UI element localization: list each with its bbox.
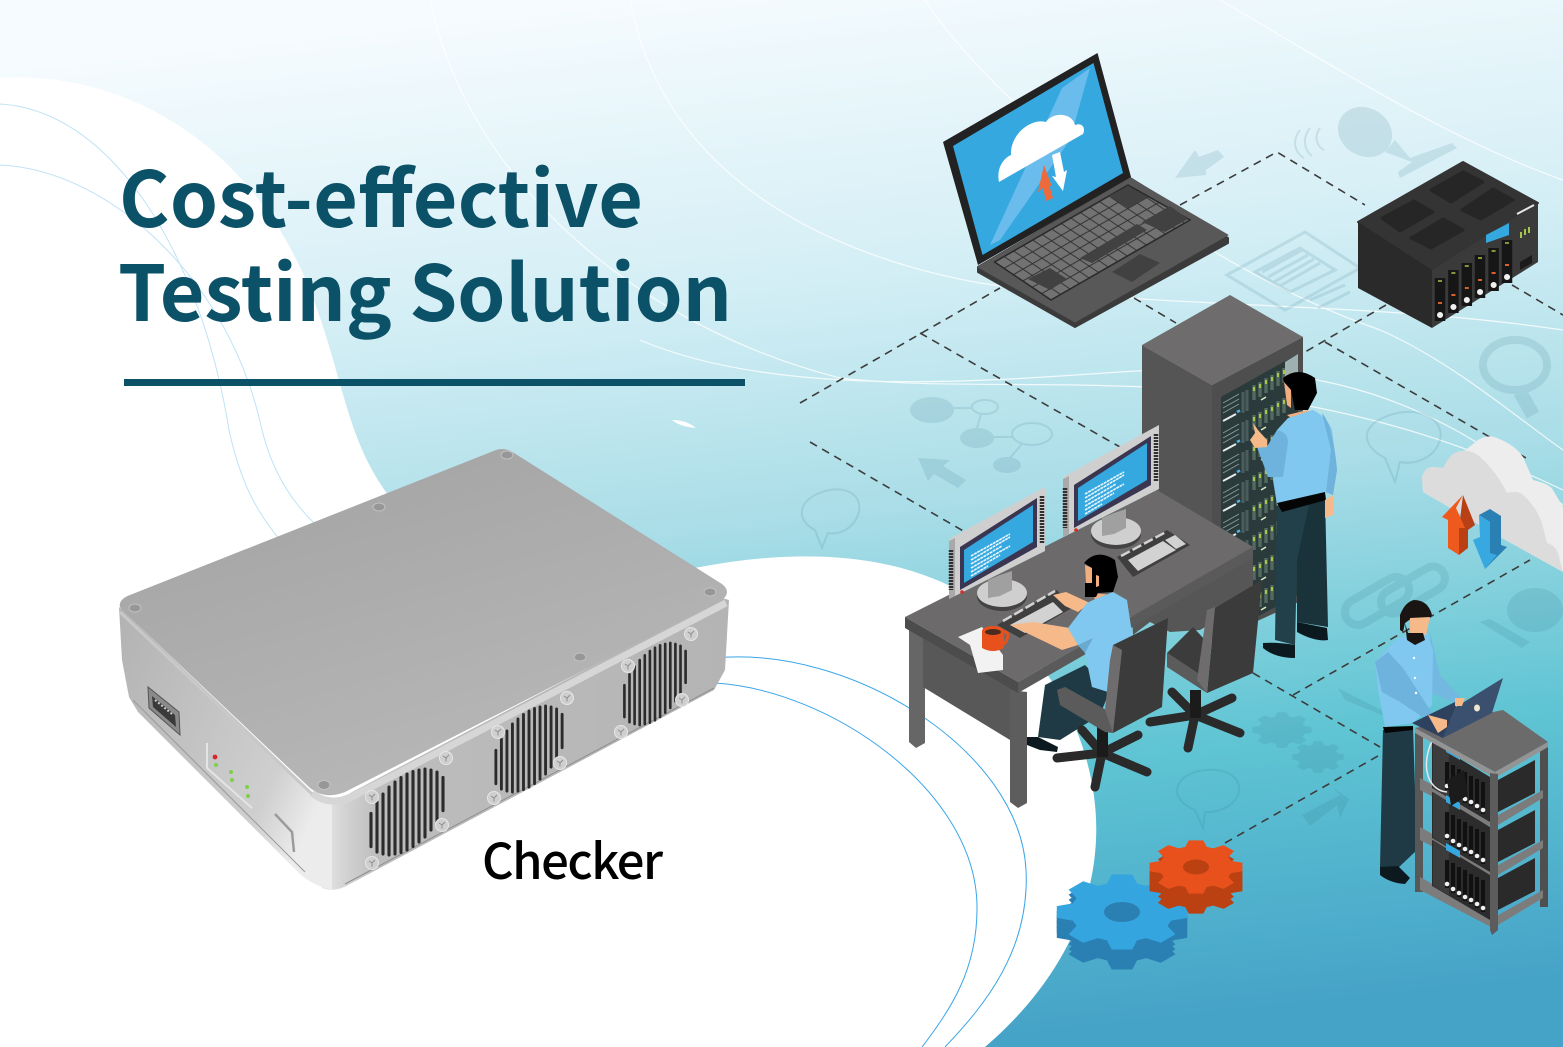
engineer shirt — [1375, 633, 1433, 727]
dashed network lines — [800, 152, 1563, 843]
orange gear — [1150, 840, 1242, 914]
shelf left leg — [1415, 730, 1423, 892]
chair 2 back — [1207, 580, 1262, 693]
NAS top pads — [1382, 172, 1513, 248]
desk leg left — [909, 628, 925, 748]
engineer shirt — [1273, 410, 1337, 505]
title: Cost-effective — [119, 139, 643, 250]
laptop screen frame — [943, 53, 1131, 265]
engineer head — [1283, 372, 1317, 410]
engineer arm — [1257, 430, 1288, 477]
device side screws — [366, 628, 698, 870]
desk top — [905, 490, 1253, 682]
shelf front leg — [1490, 773, 1498, 935]
desk leg front — [1010, 690, 1027, 808]
chair 1 back — [1113, 618, 1168, 733]
icon: cloud on screen — [998, 115, 1084, 182]
icon: gears faint — [1252, 712, 1344, 773]
title rule — [124, 379, 745, 386]
engineer at laptop, lower body — [1380, 727, 1417, 884]
computer monitors — [949, 425, 1159, 611]
laptop trackpad — [1112, 254, 1160, 282]
desk right panel — [1132, 545, 1253, 635]
engineer front leg and shoe — [1275, 500, 1310, 645]
seated engineer lower arm — [1010, 622, 1078, 650]
icon: network nodes — [910, 397, 1052, 488]
standing engineer — [1250, 372, 1337, 658]
device status LEDs — [207, 743, 252, 808]
NAS top — [1358, 162, 1538, 270]
title — [118, 139, 732, 344]
engineer at laptop, upper body — [1375, 600, 1503, 738]
blue down arrow — [1473, 509, 1507, 569]
NAS drive bays — [1438, 240, 1509, 321]
server rack — [1142, 295, 1303, 640]
engineer shoe — [1380, 866, 1410, 884]
device top face — [120, 449, 727, 795]
engineer near arm — [1375, 652, 1432, 720]
cloud upload icon — [1422, 436, 1563, 572]
laptop base — [978, 178, 1228, 327]
keyboards — [997, 530, 1190, 638]
icon: download arrow — [1052, 152, 1067, 191]
rack top — [1142, 295, 1303, 385]
laptop screen — [953, 63, 1123, 255]
office chair 2 — [1150, 580, 1262, 748]
laptop keyboard — [995, 185, 1190, 300]
faint background icons — [802, 97, 1563, 828]
engineer belt — [1383, 726, 1413, 733]
engineer hair — [1400, 600, 1432, 632]
seated engineer legs and shoes — [1038, 665, 1110, 740]
paper on desk — [958, 627, 1003, 673]
seated engineer head — [1084, 555, 1118, 597]
cloud front surface — [1422, 451, 1563, 572]
small white sliver — [672, 420, 696, 428]
NAS display — [1486, 223, 1509, 243]
equipment shelf rack — [1415, 710, 1548, 935]
device right face — [320, 598, 729, 890]
chair 2 star base — [1150, 692, 1240, 748]
stored NAS units — [1426, 736, 1535, 920]
product: Checker device — [119, 449, 729, 890]
icon: magnifier — [1483, 340, 1547, 415]
thin blue arc lines, right — [715, 657, 1026, 1047]
device top screws — [129, 451, 716, 790]
device name: Checker — [482, 823, 664, 894]
engineer rear leg and shoe — [1297, 495, 1328, 627]
engineer far arm — [1430, 633, 1460, 703]
rack left side — [1142, 345, 1212, 560]
laptop on shelf — [1412, 678, 1503, 738]
engineer hands — [1428, 698, 1465, 733]
device button — [275, 814, 294, 852]
seated engineer — [1010, 555, 1132, 752]
engineer neck — [1287, 410, 1313, 421]
icon: document monitor — [1227, 232, 1360, 310]
icon: chain link — [1340, 562, 1449, 630]
icon: upload arrow — [1038, 165, 1053, 201]
NAS storage unit — [1358, 162, 1538, 328]
red up arrow — [1442, 495, 1475, 555]
device USB port — [148, 687, 180, 735]
engineer pants — [1380, 727, 1417, 868]
icon: speech bubbles — [802, 412, 1441, 828]
thin blue arc lines, left — [0, 104, 316, 540]
title: Testing Solution — [118, 233, 732, 344]
NAS left side — [1358, 222, 1432, 328]
background white curve lines — [430, 0, 1563, 505]
NAS front — [1432, 203, 1538, 328]
chair 2 seat — [1167, 627, 1205, 678]
shelf mid levels — [1420, 778, 1543, 928]
icon: small dish right — [1480, 588, 1563, 648]
seated engineer shirt — [1068, 592, 1132, 692]
rack server units — [1221, 354, 1298, 636]
blue gear — [1057, 874, 1187, 970]
device left face — [119, 607, 332, 890]
chair 1 star base — [1057, 730, 1147, 787]
icon: arrow upper — [1175, 150, 1224, 178]
engineer belt — [1277, 492, 1326, 512]
shirt buttons — [1413, 657, 1417, 694]
engineer face — [1410, 617, 1430, 635]
shelf back leg — [1540, 747, 1548, 907]
icon: satellite dish — [1295, 97, 1457, 178]
desk side panel — [923, 638, 1017, 740]
laptop — [943, 53, 1228, 327]
coffee mug — [982, 626, 1008, 651]
cloud top surface — [1422, 436, 1563, 572]
device vents — [371, 643, 686, 855]
icon: faint arrows — [1302, 688, 1392, 826]
chair 1 seat — [1057, 687, 1113, 733]
engineer hands — [1250, 423, 1333, 518]
device chamfer highlight — [312, 603, 726, 801]
seated engineer upper hand — [1053, 592, 1090, 612]
white wave shape — [0, 77, 1096, 1047]
desk — [905, 490, 1253, 808]
seated engineer neck — [1093, 593, 1112, 602]
shelf top — [1415, 710, 1548, 772]
rack front frame — [1212, 337, 1303, 640]
office chair 1 — [1057, 618, 1168, 787]
engineer beard — [1405, 623, 1425, 645]
laptop dark keys — [1028, 186, 1188, 290]
